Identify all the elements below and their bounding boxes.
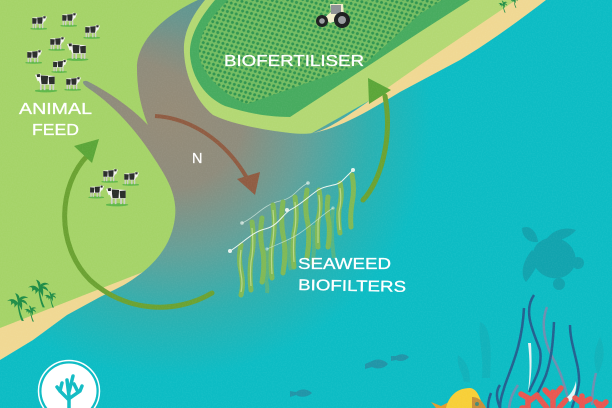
green arrow: seaweed to animal feed	[65, 139, 212, 307]
palm trees	[7, 280, 56, 322]
yellow fish	[431, 388, 486, 408]
blue reef weeds	[488, 295, 579, 408]
red coral	[521, 388, 606, 408]
left land: animal farm pasture	[0, 0, 198, 329]
back strands	[266, 208, 334, 293]
icon: coral	[57, 376, 82, 408]
palm trees on far beach	[498, 0, 518, 13]
grey reef weeds	[509, 307, 596, 408]
brown nitrogen arrow	[155, 116, 260, 195]
crop texture in field	[199, 0, 442, 104]
cattle herd lower	[88, 169, 139, 206]
coral reef logo badge	[38, 360, 100, 408]
heading: biofertiliser: BIOFERTILISER	[224, 53, 364, 70]
heading: seaweed biofilters: SEAWEED	[298, 256, 391, 273]
front rope	[230, 170, 353, 251]
seaweed biofilters	[228, 168, 355, 295]
turtle	[522, 227, 584, 290]
heading: seaweed biofilters: BIOFILTERS	[298, 277, 406, 296]
right beach	[308, 0, 546, 134]
faint background weeds	[458, 322, 604, 382]
mid rope	[267, 208, 333, 249]
right land: coastal grass	[184, 0, 520, 134]
heading: animal feed: FEED	[32, 122, 79, 139]
back rope	[242, 183, 308, 223]
cattle herd upper	[25, 13, 100, 92]
heading: seaweed biofilters	[298, 256, 406, 296]
river mouth tint	[140, 0, 230, 80]
pale reef weed blades	[528, 343, 576, 402]
rope floats	[228, 168, 355, 253]
seaweed farm field	[190, 0, 470, 117]
strand highlights	[240, 188, 341, 292]
silhouette fish	[290, 354, 409, 397]
front strands	[240, 175, 354, 295]
heading: animal feed: ANIMAL	[19, 101, 92, 118]
green arrow: seaweed to biofertiliser	[363, 78, 391, 200]
label: nitrogen: N	[192, 151, 202, 167]
tractor	[316, 4, 350, 28]
left beach	[0, 272, 143, 360]
heading: animal feed	[19, 101, 92, 139]
